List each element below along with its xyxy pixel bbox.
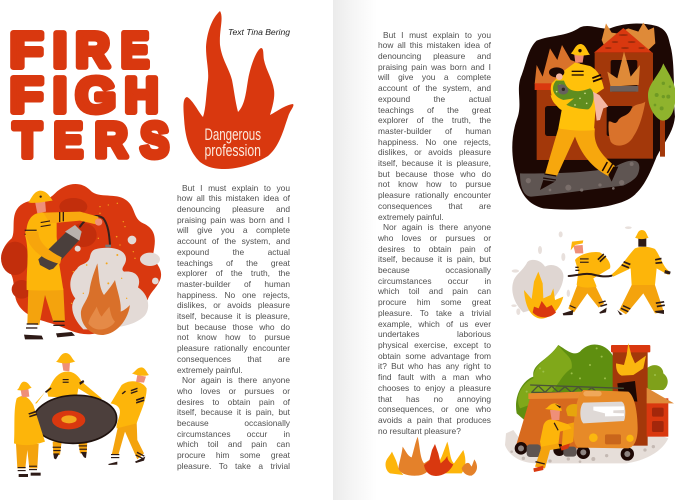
first firefighter: [563, 240, 610, 315]
left firefighter: [14, 382, 45, 477]
text column: left page: [177, 183, 290, 471]
text column: left page: Nor again is there anyone: [182, 375, 290, 385]
sparks: [71, 203, 136, 304]
text column: left page: not know how to pursue: [177, 332, 290, 342]
text column: left page: pleasure rationally encounter: [177, 343, 290, 353]
text column: left page: will give you a complete: [177, 225, 290, 235]
firefighters by the truck: [533, 403, 577, 472]
right burning house: [594, 23, 655, 159]
right firefighter: [108, 367, 149, 465]
text column: right page: it? But who has any right to: [378, 361, 491, 371]
text column: left page: itself, because it is pain, but: [177, 407, 290, 417]
text column: right page: not know how to pursue: [378, 179, 491, 189]
subtitle: Dangerous: [204, 125, 261, 144]
illustration: firefighters carrying a rescue net: [14, 353, 149, 477]
text column: right page: Nor again is there anyone: [383, 222, 491, 232]
text column: right page: But I must explain to you: [383, 30, 491, 40]
text column: right page: master-builder of human: [378, 126, 491, 136]
tree: [648, 63, 675, 157]
text column: right page: no resultant pleasure?: [378, 426, 461, 436]
text column: left page: desires to obtain pain of: [177, 397, 290, 407]
text column: right page: that has no annoying: [378, 394, 491, 404]
second firefighter: [612, 230, 671, 315]
text column: right page: denouncing pleasure and: [378, 51, 491, 61]
child: [549, 67, 608, 121]
smoke: [512, 260, 563, 312]
side house: [647, 388, 674, 437]
text column: right page: praising pain was born and I: [378, 62, 491, 72]
text column: right page: who loves or pursues or: [378, 233, 491, 243]
text column: left page: denouncing pleasure and: [177, 204, 290, 214]
arm up: [43, 212, 99, 225]
text column: right page: obtain some advantage from: [378, 351, 491, 361]
text column: right page: dislikes, or avoids pleasure: [378, 147, 491, 157]
text column: left page: consequences that are: [177, 354, 290, 364]
firefighter torso: [551, 63, 604, 131]
text column: right page: example, which of us ever: [378, 319, 491, 329]
illustration: firefighter rescuing a child from a burning house: [512, 23, 675, 210]
text column: right page: extremely painful.: [378, 212, 444, 222]
title: F: [10, 24, 43, 78]
title: G: [76, 69, 116, 123]
truck cab: [573, 390, 638, 448]
text column: left page: which toil and pain can: [177, 439, 290, 449]
illustration: two firefighters with a hose: [511, 226, 671, 319]
text column: left page: but because those who do: [177, 322, 290, 332]
text column: left page: explorer of the truth, the: [177, 268, 290, 278]
text column: right page: circumstances occur in: [378, 276, 491, 286]
wheels: [515, 442, 634, 461]
text column: right page: [378, 30, 491, 436]
text column: right page: desires to obtain pain of: [378, 244, 491, 254]
text column: right page: will give you a complete: [378, 72, 491, 82]
text column: right page: physical exercise, except to: [378, 340, 491, 350]
text column: left page: who loves or pursues or: [177, 386, 290, 396]
text column: right page: chooses to enjoy a pleasure: [378, 383, 491, 393]
road: [520, 161, 639, 197]
text column: right page: pleasure. To take a trivial: [378, 308, 491, 318]
text column: left page: But I must explain to you: [182, 183, 290, 193]
head and helmet: [574, 53, 584, 63]
title: I: [53, 69, 67, 123]
text column: left page: circumstances occur in: [177, 429, 290, 439]
arm down: [25, 232, 62, 264]
title: R: [95, 114, 128, 168]
text column: left page: because occasionally: [177, 418, 290, 428]
text column: right page: explorer of the truth, the: [378, 115, 491, 125]
title: F: [10, 69, 43, 123]
burning tower: [611, 343, 650, 446]
text column: right page: but because those who do: [378, 169, 491, 179]
trees: [516, 345, 668, 425]
text column: right page: pleasure rationally encounter: [378, 190, 491, 200]
title: H: [125, 69, 158, 123]
text column: right page: consequences that are: [378, 201, 491, 211]
title: I: [53, 24, 67, 78]
text column: right page: consequences, or one who: [378, 404, 491, 414]
ladder: [531, 385, 623, 394]
text column: right page: avoids a pain that produces: [378, 415, 491, 425]
smoke cloud: [70, 248, 148, 329]
text column: right page: happiness. No one rejects,: [378, 137, 491, 147]
text column: right page: how all this mistaken idea of: [378, 40, 491, 50]
text column: left page: happiness. No one rejects,: [177, 290, 290, 300]
text column: left page: procure him some great: [177, 450, 290, 460]
text column: right page: undertakes laborious: [378, 329, 491, 339]
text column: left page: itself, because it is pleasure,: [177, 311, 290, 321]
hose: [80, 216, 110, 245]
text column: left page: dislikes, or avoids pleasure: [177, 300, 290, 310]
text column: right page: teachings of the great: [378, 105, 491, 115]
firefighter legs: [545, 128, 615, 177]
text column: left page: account of the system, and: [177, 236, 290, 246]
firefighter coat: [25, 213, 63, 290]
firefighter trousers: [27, 288, 65, 325]
text column: right page: procure him some great: [378, 297, 491, 307]
title: S: [140, 114, 169, 168]
flame badge: [183, 11, 293, 169]
extinguisher: [38, 232, 79, 270]
sleeve around child: [551, 95, 589, 115]
ground: [505, 430, 668, 463]
illustration: fire engine and burning building: [505, 343, 674, 472]
subtitle: [204, 125, 261, 160]
illustration: firefighter with extinguisher: [1, 184, 161, 339]
text column: left page: pleasure. To take a trivial: [177, 461, 290, 471]
text column: right page: which toil and pain can: [378, 286, 491, 296]
text column: right page: expound the actual: [378, 94, 491, 104]
centre firefighter: [35, 353, 102, 459]
text column: right page: account of the system, and: [378, 83, 491, 93]
head and helmet: [35, 200, 46, 213]
title: R: [76, 24, 110, 78]
text column: left page: expound the actual: [177, 247, 290, 257]
rescue net: [33, 394, 117, 445]
decorative flames at the foot of the column: [386, 437, 477, 476]
text column: right page: because occasionally: [378, 265, 491, 275]
author credit: Text Tina Bering: [228, 27, 290, 37]
hose: [569, 274, 612, 276]
text column: right page: itself, because it is pleasure,: [378, 158, 491, 168]
title: T: [13, 114, 41, 168]
text column: left page: how all this mistaken idea of: [177, 193, 290, 203]
text column: left page: master-builder of human: [177, 279, 290, 289]
truck rear: [517, 394, 580, 450]
fire: [524, 272, 563, 319]
text column: left page: extremely painful.: [177, 365, 243, 375]
subtitle: profession: [204, 141, 261, 160]
text column: left page: teachings of the great: [177, 258, 290, 268]
title: E: [54, 114, 83, 168]
text column: left page: praising pain was born and I: [177, 215, 290, 225]
title: E: [121, 24, 149, 78]
left burning house: [535, 45, 597, 160]
text column: right page: find fault with a man who: [378, 372, 491, 382]
fire: [81, 263, 130, 335]
title: [10, 24, 169, 168]
text column: right page: itself, because it is pain, but: [378, 254, 491, 264]
